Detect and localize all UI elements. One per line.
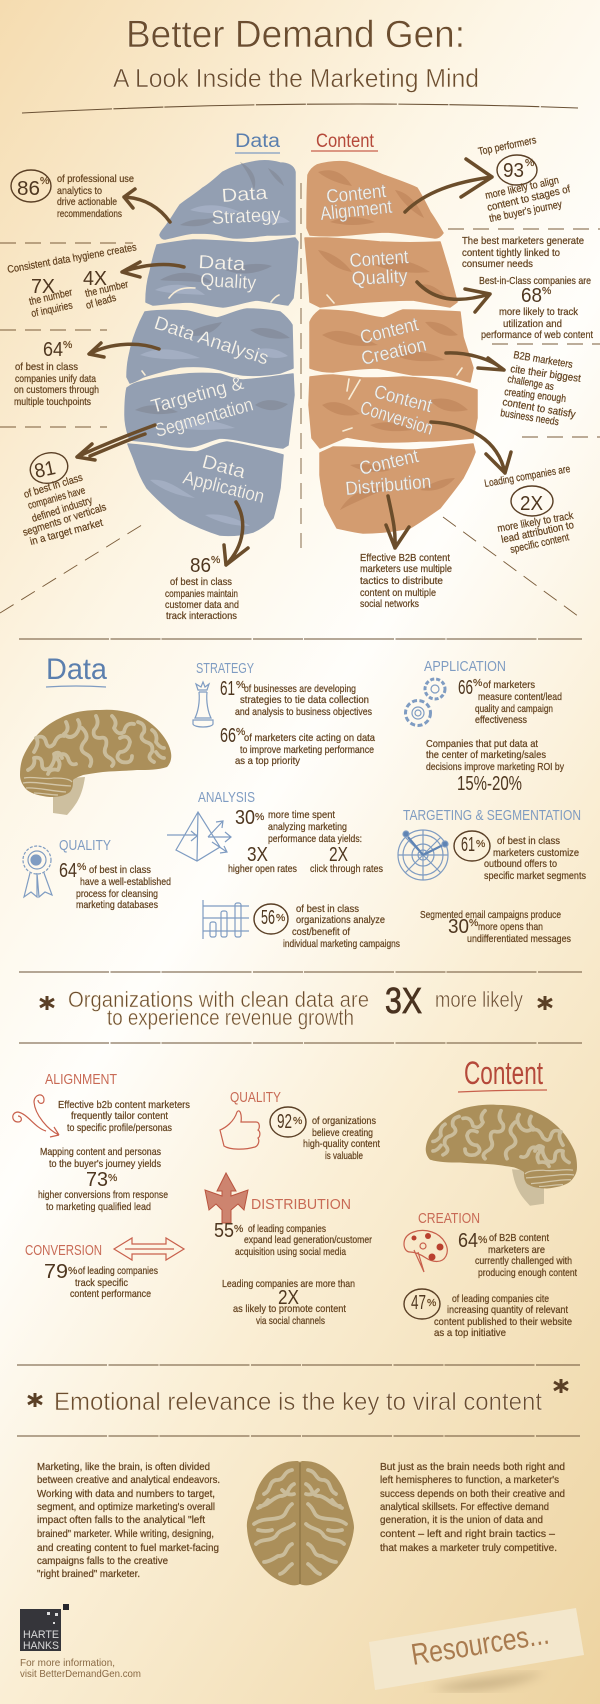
panel: quality: of best in class <box>89 864 151 876</box>
panel: quality: 64 <box>59 860 77 882</box>
panel: targeting and segmentation: undifferentiated messages <box>467 933 571 945</box>
panel: content quality: % <box>293 1115 302 1127</box>
panel: alignment: Mapping content and personas <box>40 1146 161 1158</box>
panel: targeting and segmentation: % <box>469 917 478 929</box>
panel: cost benefit: cost/benefit of <box>292 926 350 938</box>
lobe labels: Quality <box>200 270 257 294</box>
note: 86% professionals <box>11 170 134 220</box>
panel: distribution: 55 <box>214 1220 234 1242</box>
text block: more information <box>20 1657 141 1680</box>
note: creation: B2B marketers <box>512 349 574 371</box>
panel: alignment: % <box>108 1172 117 1184</box>
icon: ribbon <box>23 846 52 897</box>
lobe labels: Application <box>181 467 266 508</box>
panel: application <box>406 658 565 795</box>
callout: clean data: to experience revenue growth <box>107 1005 354 1030</box>
panel: alignment: to the buyer's journey yields <box>49 1158 161 1170</box>
brain illustration: content <box>426 1105 577 1206</box>
panel: content quality: high-quality content <box>303 1138 380 1150</box>
brain illustration: data <box>20 710 171 815</box>
note: content quality: utilization and <box>503 318 562 330</box>
note: creation: business needs <box>500 407 560 428</box>
panel: content quality: 92 <box>277 1111 292 1133</box>
panel: application: of marketers <box>483 679 535 691</box>
lobe labels: Quality <box>351 266 409 290</box>
panel: analysis: higher open rates <box>228 863 297 875</box>
panel: targeting and segmentation: outbound offers to <box>484 858 557 870</box>
note: data hygiene: 7X <box>31 276 55 298</box>
panel: alignment: ALIGNMENT <box>45 1071 117 1088</box>
text block: right paragraph: analytical skillsets. For effective demand <box>380 1501 549 1513</box>
panel: alignment <box>13 1071 190 1213</box>
note: content quality: The best marketers generate <box>462 235 584 247</box>
brain: left hemisphere lobes <box>125 161 298 535</box>
note: 93%: more likely to align <box>484 174 560 202</box>
panel: targeting and segmentation: of best in class <box>497 835 560 847</box>
arrow: analysis <box>89 343 159 357</box>
text block: right paragraph: content – left and right brain tactics – <box>380 1528 555 1540</box>
note: 64%: on customers through <box>14 384 99 396</box>
panel: application: 66 <box>458 677 473 699</box>
note: creation: challenge as <box>506 373 555 393</box>
note: 86% application: customer data and <box>165 599 239 611</box>
note: data hygiene: the number <box>28 286 74 308</box>
panel: application: measure content/lead <box>478 691 562 703</box>
note: 86% application: % <box>211 554 220 566</box>
panel: quality <box>23 837 171 911</box>
panel: strategy: % <box>236 679 245 691</box>
note: distribution <box>360 552 452 610</box>
panel: targeting and segmentation: % <box>476 838 485 850</box>
lobe labels: Segmentation <box>153 394 256 442</box>
lobe labels: Content <box>349 247 410 272</box>
panel: targeting and segmentation: 61 <box>461 834 475 856</box>
lobe labels: Targeting & <box>149 373 246 418</box>
icon: swirl arrow <box>13 1095 59 1137</box>
note: content quality: 68 <box>521 285 542 307</box>
note: 81%: of best in class <box>22 472 84 501</box>
lobe labels: Conversion <box>358 398 435 440</box>
panel: content quality: is valuable <box>325 1150 363 1162</box>
callout: clean data: more likely <box>435 987 523 1012</box>
panel: creation: content published to their website <box>434 1316 572 1328</box>
panel: analysis: ANALYSIS <box>198 789 255 806</box>
note: 64%: multiple touchpoints <box>14 396 91 408</box>
text block: left paragraph: "right brained" marketer. <box>37 1568 140 1580</box>
panel: analysis: 2X <box>329 844 348 866</box>
callout: clean data: Organizations with clean data are <box>68 987 369 1012</box>
heading: Data: Data <box>235 131 280 152</box>
text block: left paragraph: segment, and optimize marketing's overall <box>37 1501 215 1513</box>
text block: right paragraph: left hemispheres to function, a marketer's <box>380 1474 559 1486</box>
icon: palette <box>404 1230 447 1272</box>
panel: quality: QUALITY <box>59 837 111 854</box>
panel: creation: % <box>478 1234 487 1246</box>
panel: creation: as a top initiative <box>434 1327 506 1339</box>
panel: distribution: Leading companies are more than <box>222 1278 355 1290</box>
lobe labels: Distribution <box>345 472 432 500</box>
panel: application: Companies that put data at <box>426 738 538 750</box>
panel: targeting and segmentation: marketers customize <box>493 847 579 859</box>
panel: creation: currently challenged with <box>475 1255 572 1267</box>
panel: strategy: to improve marketing performance <box>240 744 374 756</box>
note: distribution: tactics to distribute <box>360 575 443 587</box>
note: distribution: content on multiple <box>360 587 436 599</box>
note: 86% application: track interactions <box>166 610 237 622</box>
note: 2X: lead attribution to <box>500 519 575 546</box>
panel: content quality <box>220 1089 380 1162</box>
panel: creation: 64 <box>458 1230 478 1252</box>
note: 86% application <box>165 554 239 622</box>
note: 81%: defined industry <box>30 494 95 525</box>
note: creation: cite their biggest <box>510 363 582 385</box>
note: data hygiene: of leads <box>85 292 118 312</box>
text block: left paragraph: Marketing, like the brain, is often divided <box>37 1461 210 1473</box>
text block: right paragraph: generation, it is the union of data and <box>380 1514 543 1526</box>
panel: conversion: 79 <box>44 1261 68 1283</box>
note: 64%: 64 <box>43 339 63 361</box>
panel: application: % <box>473 677 482 689</box>
panel: analysis: % <box>255 811 264 823</box>
panel: alignment: to marketing qualified lead <box>46 1201 151 1213</box>
note: content quality: more likely to track <box>499 306 579 318</box>
panel: analysis: analyzing marketing <box>268 821 347 833</box>
panel: alignment: 73 <box>86 1169 108 1191</box>
panel: creation: of B2B content <box>489 1232 549 1244</box>
note: 93%: % <box>525 157 534 169</box>
heading: Content: Content <box>316 131 375 152</box>
heading: Content section: Content <box>464 1055 543 1091</box>
panel: cost benefit: individual marketing campaigns <box>283 938 400 950</box>
panel: strategy <box>193 660 375 767</box>
lobe labels: Creation <box>359 335 428 370</box>
note: 86% professionals: % <box>40 175 49 187</box>
panel: targeting and segmentation <box>398 807 586 945</box>
panel: targeting and segmentation: Segmented email campaigns produce <box>420 909 561 921</box>
lobe labels: Content <box>372 382 435 417</box>
subtitle: A Look Inside the Marketing Mind <box>113 63 479 93</box>
text block: more information: For more information, <box>20 1657 115 1669</box>
text block: right paragraph: success depends on both their creative and <box>380 1488 565 1500</box>
note: content quality <box>462 235 593 341</box>
panel: cost benefit: 56 <box>261 907 275 929</box>
panel: content quality: QUALITY <box>230 1089 281 1106</box>
icon: star <box>28 1393 42 1407</box>
text block: right paragraph <box>380 1461 565 1554</box>
panel: targeting and segmentation: more opens than <box>478 921 543 933</box>
lobe labels: Content <box>357 446 421 480</box>
arrow: targeting <box>77 425 155 460</box>
lobe labels: Data Analysis <box>151 313 271 370</box>
note: 64%: companies unify data <box>15 373 96 385</box>
callout: clean data <box>40 980 552 1030</box>
panel: strategy: of businesses are developing <box>244 683 356 695</box>
icon: bar chart <box>203 900 249 939</box>
note: 93%: 93 <box>503 160 524 182</box>
title: Better Demand Gen: <box>126 14 465 56</box>
note: data hygiene: Consistent data hygiene creates <box>6 241 138 276</box>
panel: creation: increasing quantity of relevant <box>447 1304 568 1316</box>
panel: distribution: acquisition using social media <box>235 1246 346 1258</box>
note: 81%: in a target market <box>29 517 104 548</box>
panel: creation: % <box>427 1297 436 1309</box>
note: distribution: Effective B2B content <box>360 552 450 564</box>
note: 2X: 2X <box>520 493 543 515</box>
panel: application: 15%-20% <box>457 773 522 795</box>
panel: distribution: DISTRIBUTION <box>251 1196 351 1213</box>
panel: distribution: of leading companies <box>248 1223 326 1235</box>
panel: distribution: as likely to promote content <box>233 1303 346 1315</box>
note: resources <box>369 1608 584 1691</box>
panel: analysis: performance data yields: <box>268 833 362 845</box>
panel: strategy: strategies to tie data collection <box>240 694 369 706</box>
note: 93%: Top performers <box>477 134 537 158</box>
arrow: conversion <box>431 422 511 473</box>
panel: distribution: via social channels <box>256 1315 325 1327</box>
panel: analysis <box>167 789 383 875</box>
lobe labels: Data <box>221 183 269 207</box>
lobe labels <box>149 181 435 508</box>
lobe labels: Data <box>198 252 246 275</box>
note: data hygiene: of inquiries <box>30 299 74 320</box>
logo: Harte Hanks: HANKS <box>23 1640 59 1652</box>
panel: content quality: of organizations <box>312 1115 376 1127</box>
lobe labels: Content <box>358 314 421 349</box>
brain illustration: top view <box>247 1461 354 1585</box>
note: distribution: social networks <box>360 598 419 610</box>
note: 64% <box>14 339 99 408</box>
note: data hygiene: 4X <box>83 268 107 290</box>
panel: distribution: expand lead generation/customer <box>244 1234 372 1246</box>
panel: analysis: 3X <box>247 844 268 866</box>
panel: cost benefit: organizations analyze <box>296 914 385 926</box>
note: 81%: companies have <box>27 484 87 512</box>
panel: distribution <box>205 1173 372 1327</box>
arrow: strategy <box>124 189 170 222</box>
icon: dartboard <box>398 830 448 880</box>
note: content quality: % <box>542 285 551 297</box>
panel: creation: producing enough content <box>478 1267 577 1279</box>
note: 81% <box>21 449 108 548</box>
panel: application: quality and campaign <box>475 703 553 715</box>
arrow: distribution <box>386 496 409 548</box>
text block: left paragraph: campaigns falls to the creative <box>37 1555 168 1567</box>
panel: conversion: % <box>68 1265 77 1277</box>
icon: thumbs up <box>220 1111 260 1149</box>
text block: left paragraph: brained" marketer. While writing, designing, <box>37 1528 214 1540</box>
panel: conversion: CONVERSION <box>25 1242 102 1259</box>
icon: chess queen <box>193 682 213 727</box>
panel: application: APPLICATION <box>424 658 506 675</box>
note: 93%: content to stages of <box>486 183 572 214</box>
logo: Harte Hanks <box>20 1604 69 1652</box>
text block: right paragraph: that makes a marketer truly competitive. <box>380 1542 557 1554</box>
panel: analysis: more time spent <box>268 809 335 821</box>
panel: distribution: % <box>234 1223 243 1235</box>
panel: creation <box>404 1210 577 1339</box>
icon: branching arrows <box>205 1173 248 1223</box>
text block: left paragraph: Working with data and numbers to target, <box>37 1488 215 1500</box>
panel: strategy: as a top priority <box>235 755 301 767</box>
note: 2X: Loading companies are <box>483 463 571 490</box>
panel: distribution: 2X <box>278 1287 299 1309</box>
panel: quality: % <box>77 861 86 873</box>
panel: alignment: frequently tailor content <box>71 1110 168 1122</box>
lobe labels: Strategy <box>211 204 282 229</box>
lobe labels: Content <box>325 181 388 208</box>
note: content quality: consumer needs <box>462 258 533 270</box>
callout: emotional relevance: Emotional relevance is the key to viral content <box>54 1388 542 1416</box>
heading: Data section: Data <box>46 653 107 686</box>
note: data hygiene <box>6 241 138 320</box>
note: 86% application: companies maintain <box>165 588 238 600</box>
panel: alignment: higher conversions from response <box>38 1189 168 1201</box>
icon: double arrow <box>114 1238 184 1260</box>
note: 86% professionals: recommendations <box>57 208 122 220</box>
note: 93% <box>477 134 572 225</box>
note: 2X: specific content <box>509 531 570 556</box>
text block: left paragraph: impact often falls to the analytical "left <box>37 1514 205 1526</box>
panel: application: the center of marketing/sales <box>426 749 546 761</box>
panel: creation: 47 <box>411 1292 426 1314</box>
text block: more information: visit BetterDemandGen.com <box>20 1668 141 1680</box>
panel: cost benefit <box>203 900 400 950</box>
arrow: application <box>224 502 248 565</box>
text block: left paragraph: between creative and analytical endeavors. <box>37 1474 220 1486</box>
brain: right hemisphere lobes <box>305 162 477 533</box>
panel: quality: process for cleansing <box>76 888 158 900</box>
arrow: alignment <box>405 159 492 212</box>
panel: strategy: 61 <box>220 678 235 700</box>
note: 86% professionals: 86 <box>17 178 40 200</box>
panel: strategy: of marketers cite acting on data <box>244 732 375 744</box>
panel: quality: have a well-established <box>80 876 171 888</box>
panel: quality: marketing databases <box>76 899 158 911</box>
lobe labels: Data <box>200 452 248 483</box>
note: creation: creating enough <box>504 386 567 405</box>
note: 86% application: 86 <box>190 555 211 577</box>
note: 64%: of best in class <box>15 361 78 373</box>
panel: conversion: track specific <box>75 1277 128 1289</box>
panel: cost benefit: of best in class <box>296 903 359 915</box>
panel: alignment: Effective b2b content marketers <box>58 1099 190 1111</box>
panel: strategy: STRATEGY <box>196 660 254 677</box>
note: 86% professionals: analytics to <box>57 185 102 197</box>
panel: targeting and segmentation: 30 <box>448 916 469 938</box>
note: 81%: segments or verticals <box>21 501 108 539</box>
panel: creation: CREATION <box>418 1210 480 1227</box>
note: 2X: more likely to track <box>496 510 575 535</box>
text block: left paragraph: and creating content to fuel market-facing <box>37 1542 219 1554</box>
panel: analysis: click through rates <box>310 863 383 875</box>
logo: Harte Hanks: HARTE <box>23 1629 59 1641</box>
panel: application: decisions improve marketing ROI by <box>426 761 565 773</box>
panel: alignment: to specific profile/personas <box>67 1122 172 1134</box>
icon: gears <box>406 679 445 726</box>
note: distribution: marketers use multiple <box>360 563 452 575</box>
lobe labels: Alignment <box>319 196 394 225</box>
note: data hygiene: the number <box>84 278 130 300</box>
panel: conversion <box>25 1238 184 1300</box>
arrow: creation <box>446 353 504 370</box>
note: 64%: % <box>63 339 72 351</box>
note: 81%: 81 <box>32 457 58 483</box>
arrow: quality <box>122 262 184 277</box>
panel: conversion: content performance <box>70 1288 151 1300</box>
panel: targeting and segmentation: specific market segments <box>484 870 586 882</box>
text block: left paragraph <box>37 1461 220 1580</box>
panel: strategy: % <box>236 726 245 738</box>
note: content quality: content tightly linked to <box>462 247 560 259</box>
note: creation <box>500 349 582 428</box>
icon: star <box>40 996 54 1010</box>
panel: creation: of leading companies cite <box>452 1293 549 1305</box>
panel: creation: marketers are <box>488 1244 545 1256</box>
panel: application: effectiveness <box>475 714 527 726</box>
note: 86% professionals: of professional use <box>57 173 134 185</box>
note: 2X <box>483 463 575 556</box>
note: 86% professionals: drive actionable <box>57 196 117 208</box>
panel: conversion: of leading companies <box>78 1265 158 1277</box>
icon: prism <box>167 812 231 861</box>
arrow: content quality <box>417 282 490 312</box>
heading: Content section <box>458 1055 547 1092</box>
panel: cost benefit: % <box>276 912 285 924</box>
callout: clean data: 3X <box>385 980 422 1021</box>
panel: strategy: and analysis to business objectives <box>235 706 372 718</box>
note: 93%: the buyer's journey <box>488 198 564 225</box>
note: 86% application: of best in class <box>170 576 232 588</box>
panel: content quality: believe creating <box>312 1127 373 1139</box>
text block: right paragraph: But just as the brain needs both right and <box>380 1461 565 1473</box>
note: resources: Resources... <box>409 1618 551 1672</box>
panel: strategy: 66 <box>220 725 236 747</box>
panel: analysis: 30 <box>235 807 255 829</box>
note: creation: content to satisfy <box>501 396 577 421</box>
